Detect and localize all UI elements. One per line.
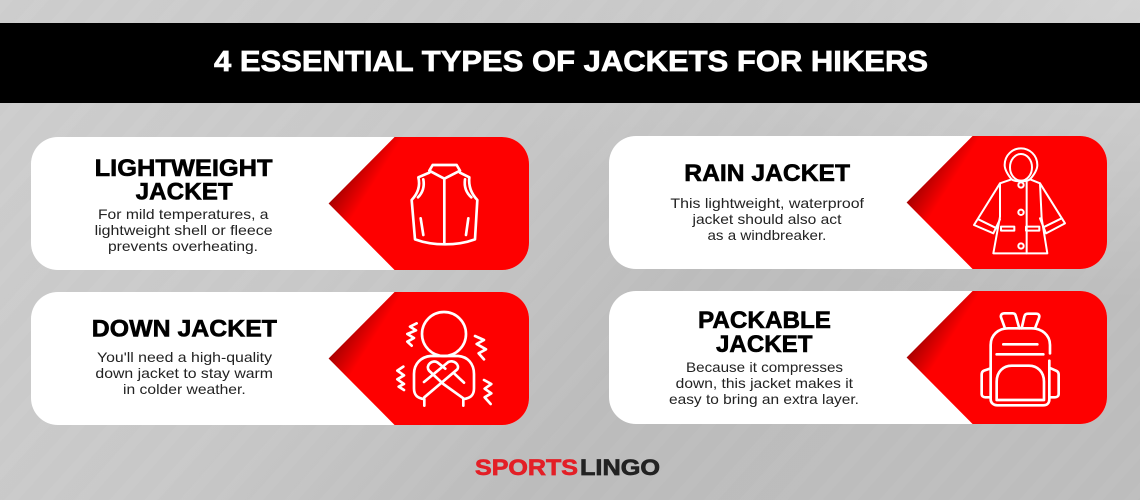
- description: packable jacket: Because it compresses: [686, 359, 843, 375]
- panel: rain jacket: [609, 136, 1107, 269]
- description: rain jacket: as a windbreaker.: [708, 227, 826, 243]
- title banner: [0, 23, 1140, 103]
- panel: lightweight jacket: [31, 137, 529, 270]
- heading: packable jacket: [698, 307, 831, 358]
- heading: down jacket: DOWN JACKET: [92, 316, 277, 343]
- icon: shivering person: [397, 312, 491, 406]
- description: lightweight jacket: For mild temperatures, a: [98, 206, 269, 222]
- description: rain jacket: [670, 195, 864, 243]
- icon: rain coat: [974, 148, 1065, 253]
- logo: SportsLingo: [475, 455, 660, 480]
- description: packable jacket: down, this jacket makes it: [676, 375, 853, 391]
- heading: packable jacket: JACKET: [716, 331, 813, 358]
- red tab: lightweight jacket: [329, 137, 529, 270]
- description: packable jacket: [669, 359, 859, 407]
- panel: down jacket: [31, 292, 529, 425]
- red tab: rain jacket: [907, 136, 1107, 269]
- heading: lightweight jacket: LIGHTWEIGHT: [95, 155, 273, 182]
- description: rain jacket: This lightweight, waterproof: [670, 195, 864, 211]
- icon: vest: [412, 165, 477, 244]
- red tab: packable jacket: [907, 291, 1107, 424]
- description: down jacket: You'll need a high-quality: [97, 349, 272, 365]
- logo: SportsLingo: SPORTS: [475, 455, 578, 480]
- red tab: down jacket: [329, 292, 529, 425]
- heading: lightweight jacket: JACKET: [136, 178, 233, 206]
- heading: packable jacket: PACKABLE: [698, 307, 831, 334]
- description: lightweight jacket: lightweight shell or fleece: [95, 222, 273, 238]
- panel: packable jacket: [609, 291, 1107, 424]
- description: packable jacket: easy to bring an extra layer.: [669, 391, 859, 407]
- heading: lightweight jacket: [95, 155, 273, 206]
- description: down jacket: [95, 349, 273, 397]
- title: 4 ESSENTIAL TYPES OF JACKETS FOR HIKERS: [214, 46, 928, 78]
- icon: backpack: [982, 313, 1059, 405]
- logo: SportsLingo: LINGO: [580, 455, 660, 480]
- heading: rain jacket: RAIN JACKET: [684, 160, 850, 187]
- description: rain jacket: jacket should also act: [691, 211, 842, 227]
- description: down jacket: in colder weather.: [123, 381, 246, 397]
- description: lightweight jacket: [95, 206, 273, 254]
- description: lightweight jacket: prevents overheating.: [108, 238, 258, 254]
- description: down jacket: down jacket to stay warm: [95, 365, 273, 381]
